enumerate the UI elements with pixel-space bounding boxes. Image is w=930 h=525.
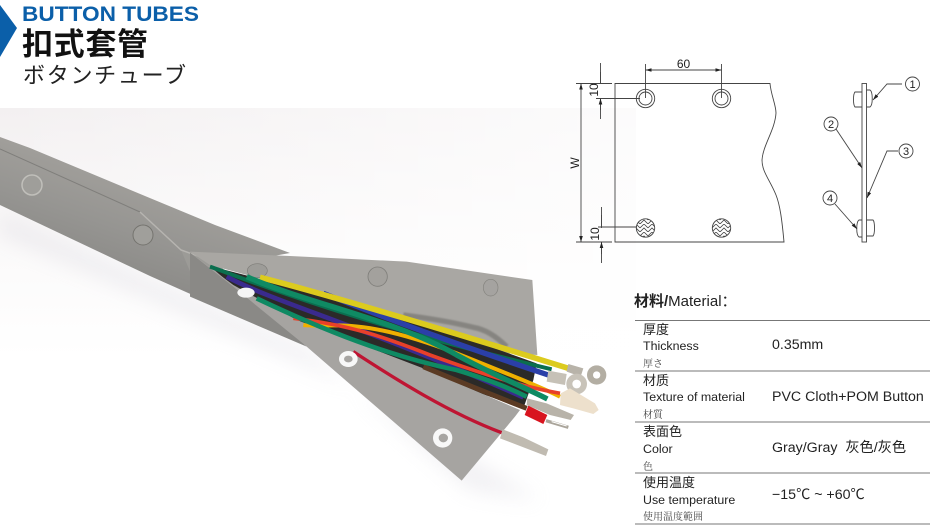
button bottom — [857, 220, 874, 237]
terminal: ring on blue wire — [547, 371, 587, 394]
wire: red — [293, 318, 560, 393]
callout 1 — [873, 77, 920, 100]
wire: dark red on flap — [353, 352, 502, 433]
terminal: insulated bullet — [560, 388, 599, 414]
row: use temperature: 使用温度 — [643, 475, 695, 490]
dimension: W — [568, 84, 612, 242]
dimension: 60 — [646, 57, 722, 98]
wires and terminals — [190, 252, 606, 481]
wire: blue — [323, 293, 548, 375]
dimension: top 10: 10 — [587, 83, 601, 97]
row: color: 色 — [643, 460, 653, 473]
dimension: bottom 10: 10 — [588, 227, 602, 241]
terminal: crimp pair — [527, 398, 574, 420]
wire: yellow — [260, 277, 568, 368]
callout 3 — [867, 144, 913, 198]
lower flap — [190, 253, 520, 481]
row: use temperature: Use temperature — [643, 493, 735, 507]
upper flap — [190, 252, 537, 355]
callout 4 — [823, 191, 857, 229]
row: color: 表面色 — [643, 424, 682, 439]
wire: green lower — [257, 298, 527, 397]
callout 2 — [824, 117, 862, 168]
terminal: pin — [500, 429, 548, 456]
dimension: bottom 10 — [588, 207, 637, 263]
tube interior shadow — [210, 266, 537, 408]
heading: English title: BUTTON TUBES — [22, 2, 199, 26]
material table — [634, 292, 930, 524]
heading: Chinese title: 扣式套管 — [22, 27, 148, 62]
callout 2: 2 — [828, 119, 834, 131]
button: flap 2 — [368, 267, 387, 286]
row: use temperature: 使用温度範囲 — [643, 510, 703, 523]
row: texture of material: 材质 — [643, 373, 669, 388]
terminal: ring on yellow wire — [567, 364, 606, 385]
grommet: white 1 — [237, 288, 255, 298]
tube shadow — [0, 212, 540, 500]
row: thickness — [643, 322, 823, 370]
callout 3: 3 — [903, 146, 909, 158]
row: texture of material: PVC Cloth+POM Button — [772, 389, 924, 405]
row: thickness: 厚度 — [643, 322, 669, 337]
tube body — [0, 137, 320, 350]
wire: purple — [227, 277, 523, 397]
row: use temperature: −15℃ ~ +60℃ — [772, 487, 865, 503]
button top — [854, 90, 872, 107]
dimension: top 10 — [587, 63, 640, 119]
wire: amber — [303, 325, 560, 397]
dimension: W: W — [568, 157, 582, 169]
technical drawing: side view — [823, 77, 920, 242]
product photo: button tube with wires — [0, 137, 606, 500]
technical drawing: front view — [568, 57, 784, 263]
table rules — [635, 320, 930, 524]
heading: Japanese title: ボタンチューブ — [23, 63, 186, 88]
callout 1: 1 — [909, 79, 916, 91]
callout 4: 4 — [827, 193, 833, 205]
row: color: Gray/Gray 灰色/灰色 — [772, 439, 906, 456]
table heading: 材料/Material： — [634, 292, 737, 310]
dimension: 60: 60 — [677, 57, 690, 71]
button: tube middle — [133, 225, 153, 245]
row: color: Color — [643, 442, 673, 456]
holes — [636, 89, 731, 237]
icon: blue triangle marker — [0, 5, 17, 57]
button: flap 1 — [247, 264, 267, 278]
button: flap 3 — [483, 279, 498, 296]
plate — [862, 84, 866, 242]
wire: green upper — [247, 277, 547, 399]
row: texture of material: Texture of material — [643, 390, 745, 404]
row: thickness: Thickness — [643, 339, 699, 353]
grommet: white 2 — [339, 351, 358, 367]
wire: brown — [423, 367, 527, 408]
terminal: red spade — [525, 406, 568, 427]
button: tube left — [22, 175, 42, 195]
wire: dark green rear — [210, 267, 552, 369]
grommet: white 3 — [433, 428, 452, 448]
row: color — [643, 424, 906, 473]
row: use temperature — [643, 475, 865, 523]
row: texture of material — [643, 373, 924, 421]
row: texture of material: 材質 — [643, 408, 664, 421]
header: product title — [0, 2, 199, 88]
row: thickness: 厚さ — [643, 358, 663, 370]
row: thickness: 0.35mm — [772, 337, 823, 353]
sheet outline — [615, 84, 784, 242]
